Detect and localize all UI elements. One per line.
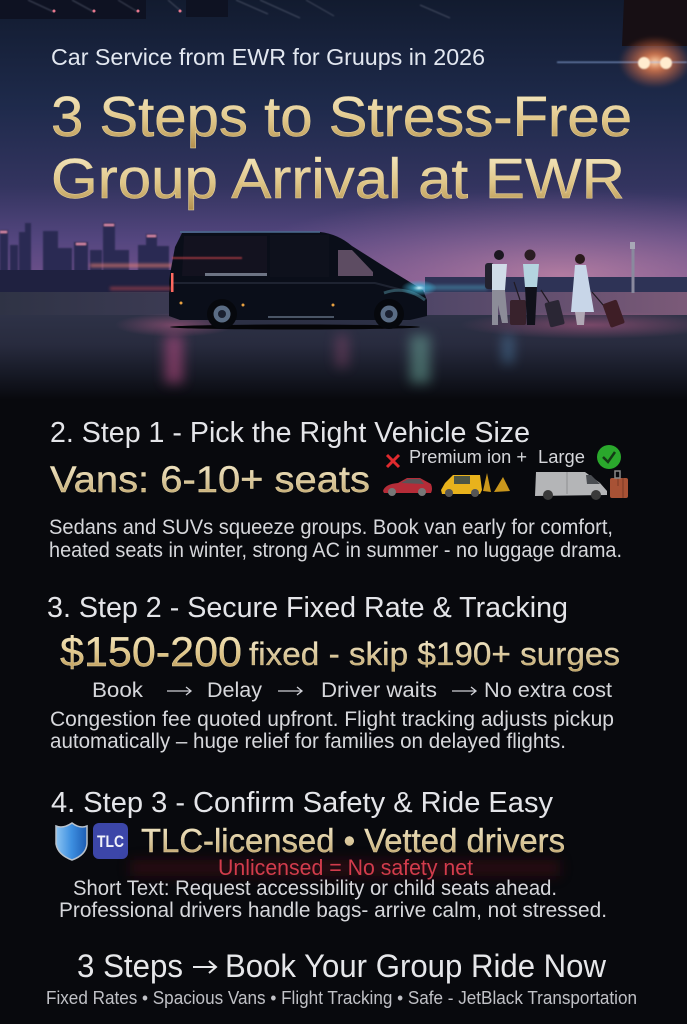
warning: Unlicensed = No safety net xyxy=(218,855,473,880)
process flow: Delay xyxy=(207,678,262,702)
step 3 heading: 4. Step 3 - Confirm Safety & Ride Easy xyxy=(51,787,553,819)
icon: yellow van and cones xyxy=(441,473,510,497)
process flow: Book xyxy=(92,678,143,702)
subtitle: Car Service from EWR for Gruups in 2026 xyxy=(51,44,485,70)
icon: TLC badge: TLC xyxy=(97,832,124,851)
price highlight: $150-200 xyxy=(60,628,242,675)
van xyxy=(110,232,487,330)
step 2 body: automatically – huge relief for families on delayed flights. xyxy=(50,729,566,753)
traveller 2 xyxy=(523,250,539,325)
process flow xyxy=(92,678,612,702)
licence highlight: TLC-licensed • Vetted drivers xyxy=(141,822,565,859)
traveller 1 xyxy=(485,250,508,325)
step 3 body xyxy=(59,876,607,922)
step 1 body xyxy=(49,515,622,562)
step 2 body xyxy=(50,707,614,753)
title: Group Arrival at EWR xyxy=(51,147,625,211)
icon: white van xyxy=(535,472,607,500)
step 1 body: Sedans and SUVs squeeze groups. Book van early for comfort, xyxy=(49,515,613,539)
step 2 body: Congestion fee quoted upfront. Flight tracking adjusts pickup xyxy=(50,707,614,731)
call to action: Book Your Group Ride Now xyxy=(225,948,607,984)
icon: shield xyxy=(56,823,87,860)
step 1 body: heated seats in winter, strong AC in summer - no luggage drama. xyxy=(49,538,622,562)
price highlight: fixed - skip $190+ surges xyxy=(249,636,620,672)
icon: luggage xyxy=(610,471,628,498)
step 1 heading: 2. Step 1 - Pick the Right Vehicle Size xyxy=(50,417,530,449)
suitcase 2 xyxy=(541,290,565,328)
step 2 heading: 3. Step 2 - Secure Fixed Rate & Tracking xyxy=(47,592,568,624)
suitcase 1 xyxy=(510,282,526,325)
vehicle size labels: Large xyxy=(538,447,585,467)
call to action: 3 Steps xyxy=(77,948,183,984)
step 3 body: Short Text: Request accessibility or child seats ahead. xyxy=(73,876,557,900)
icon: green check xyxy=(597,445,621,469)
title: 3 Steps to Stress-Free xyxy=(51,85,632,149)
section: step 3 xyxy=(51,787,607,922)
icon: TLC badge xyxy=(93,823,128,859)
icon: red cross xyxy=(387,455,399,467)
suitcase 3 xyxy=(592,292,625,328)
section: step 1 xyxy=(49,417,628,562)
icon: red sedan xyxy=(383,478,432,496)
title xyxy=(51,85,632,211)
warning xyxy=(130,855,560,880)
traveller 3 xyxy=(571,254,594,325)
step 3 body: Professional drivers handle bags- arrive calm, not stressed. xyxy=(59,898,607,922)
vehicle size labels xyxy=(409,447,585,467)
footer: Fixed Rates • Spacious Vans • Flight Tracking • Safe - JetBlack Transportation xyxy=(46,988,637,1008)
process flow: No extra cost xyxy=(484,678,612,702)
vehicle size labels: Premium ion + xyxy=(409,447,527,467)
step 1 highlight: Vans: 6-10+ seats xyxy=(50,459,370,500)
price highlight xyxy=(60,628,620,675)
travellers with luggage xyxy=(485,250,625,328)
section: step 2 xyxy=(47,592,620,753)
city skyline xyxy=(0,223,169,275)
hero scene: night airport with van and travellers xyxy=(0,0,687,400)
process flow: Driver waits xyxy=(321,678,437,702)
